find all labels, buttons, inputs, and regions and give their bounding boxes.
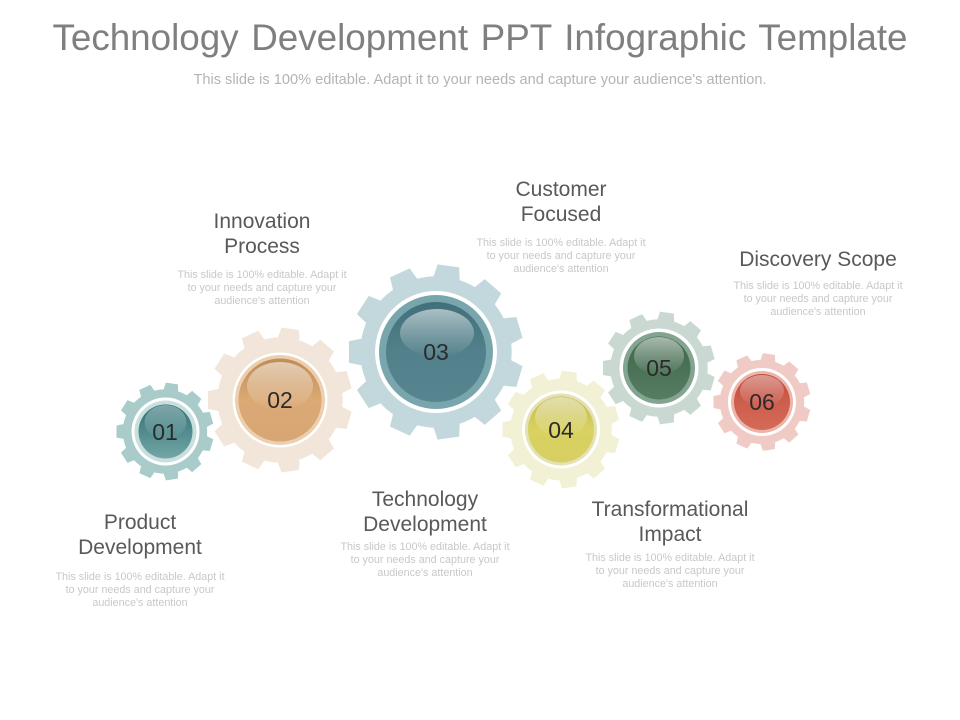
gear 06: 06 (749, 389, 775, 415)
text block: Transformational Impact: Transformational (592, 498, 748, 521)
gear 05: 05 (646, 355, 672, 381)
subtitle: This slide is 100% editable. Adapt it to your needs and capture your audience's attention. (193, 72, 767, 88)
text block: Innovation Process: Process (224, 235, 300, 258)
text block: Transformational Impact: to your needs and capture your (596, 565, 744, 577)
text block: Customer Focused: to your needs and capture your (487, 250, 635, 262)
gear 03 (349, 264, 523, 440)
text block: Product Development (55, 511, 225, 609)
gear 05 (603, 311, 715, 425)
gear 04 (502, 370, 620, 489)
text block: Customer Focused (476, 178, 646, 275)
text block: Technology Development: audience's attention (377, 567, 473, 579)
gear 01: 01 (152, 419, 178, 445)
text block: Innovation Process: This slide is 100% editable. Adapt it (177, 269, 347, 281)
text block: Transformational Impact (585, 498, 755, 590)
text block: Discovery Scope (733, 248, 903, 318)
text block: Product Development: Development (78, 536, 202, 559)
text block: Product Development: to your needs and capture your (66, 584, 214, 596)
text block: Product Development: This slide is 100% editable. Adapt it (55, 571, 225, 583)
text block: Customer Focused: This slide is 100% editable. Adapt it (476, 237, 646, 249)
text block: Technology Development: This slide is 100% editable. Adapt it (340, 541, 510, 553)
text block: Transformational Impact: audience's attention (622, 578, 718, 590)
gear 04: 04 (548, 417, 574, 443)
text block: Discovery Scope: audience's attention (770, 306, 866, 318)
gear 02: 02 (267, 387, 293, 413)
text block: Customer Focused: audience's attention (513, 263, 609, 275)
text block: Innovation Process (177, 210, 347, 307)
gear 01 (116, 382, 214, 481)
gear 06 (714, 353, 811, 451)
text block: Technology Development: to your needs and capture your (351, 554, 499, 566)
text block: Innovation Process: Innovation (214, 210, 310, 233)
text block: Transformational Impact: This slide is 100% editable. Adapt it (585, 552, 755, 564)
text block: Discovery Scope: to your needs and capture your (744, 293, 892, 305)
text block: Technology Development: Technology (372, 488, 478, 511)
text block: Technology Development: Development (363, 513, 487, 536)
text block: Discovery Scope: Discovery Scope (739, 248, 897, 271)
text block: Technology Development (340, 488, 510, 579)
text block: Innovation Process: audience's attention (214, 295, 310, 307)
gear 03: 03 (423, 339, 449, 365)
text block: Product Development: Product (104, 511, 176, 534)
text block: Product Development: audience's attention (92, 597, 188, 609)
text block: Transformational Impact: Impact (638, 523, 702, 546)
text block: Customer Focused: Customer (515, 178, 607, 201)
text block: Innovation Process: to your needs and capture your (188, 282, 336, 294)
text block: Customer Focused: Focused (521, 203, 601, 226)
gear 02 (208, 327, 352, 473)
text block: Discovery Scope: This slide is 100% editable. Adapt it (733, 280, 903, 292)
title: Technology Development PPT Infographic Template (52, 17, 908, 58)
